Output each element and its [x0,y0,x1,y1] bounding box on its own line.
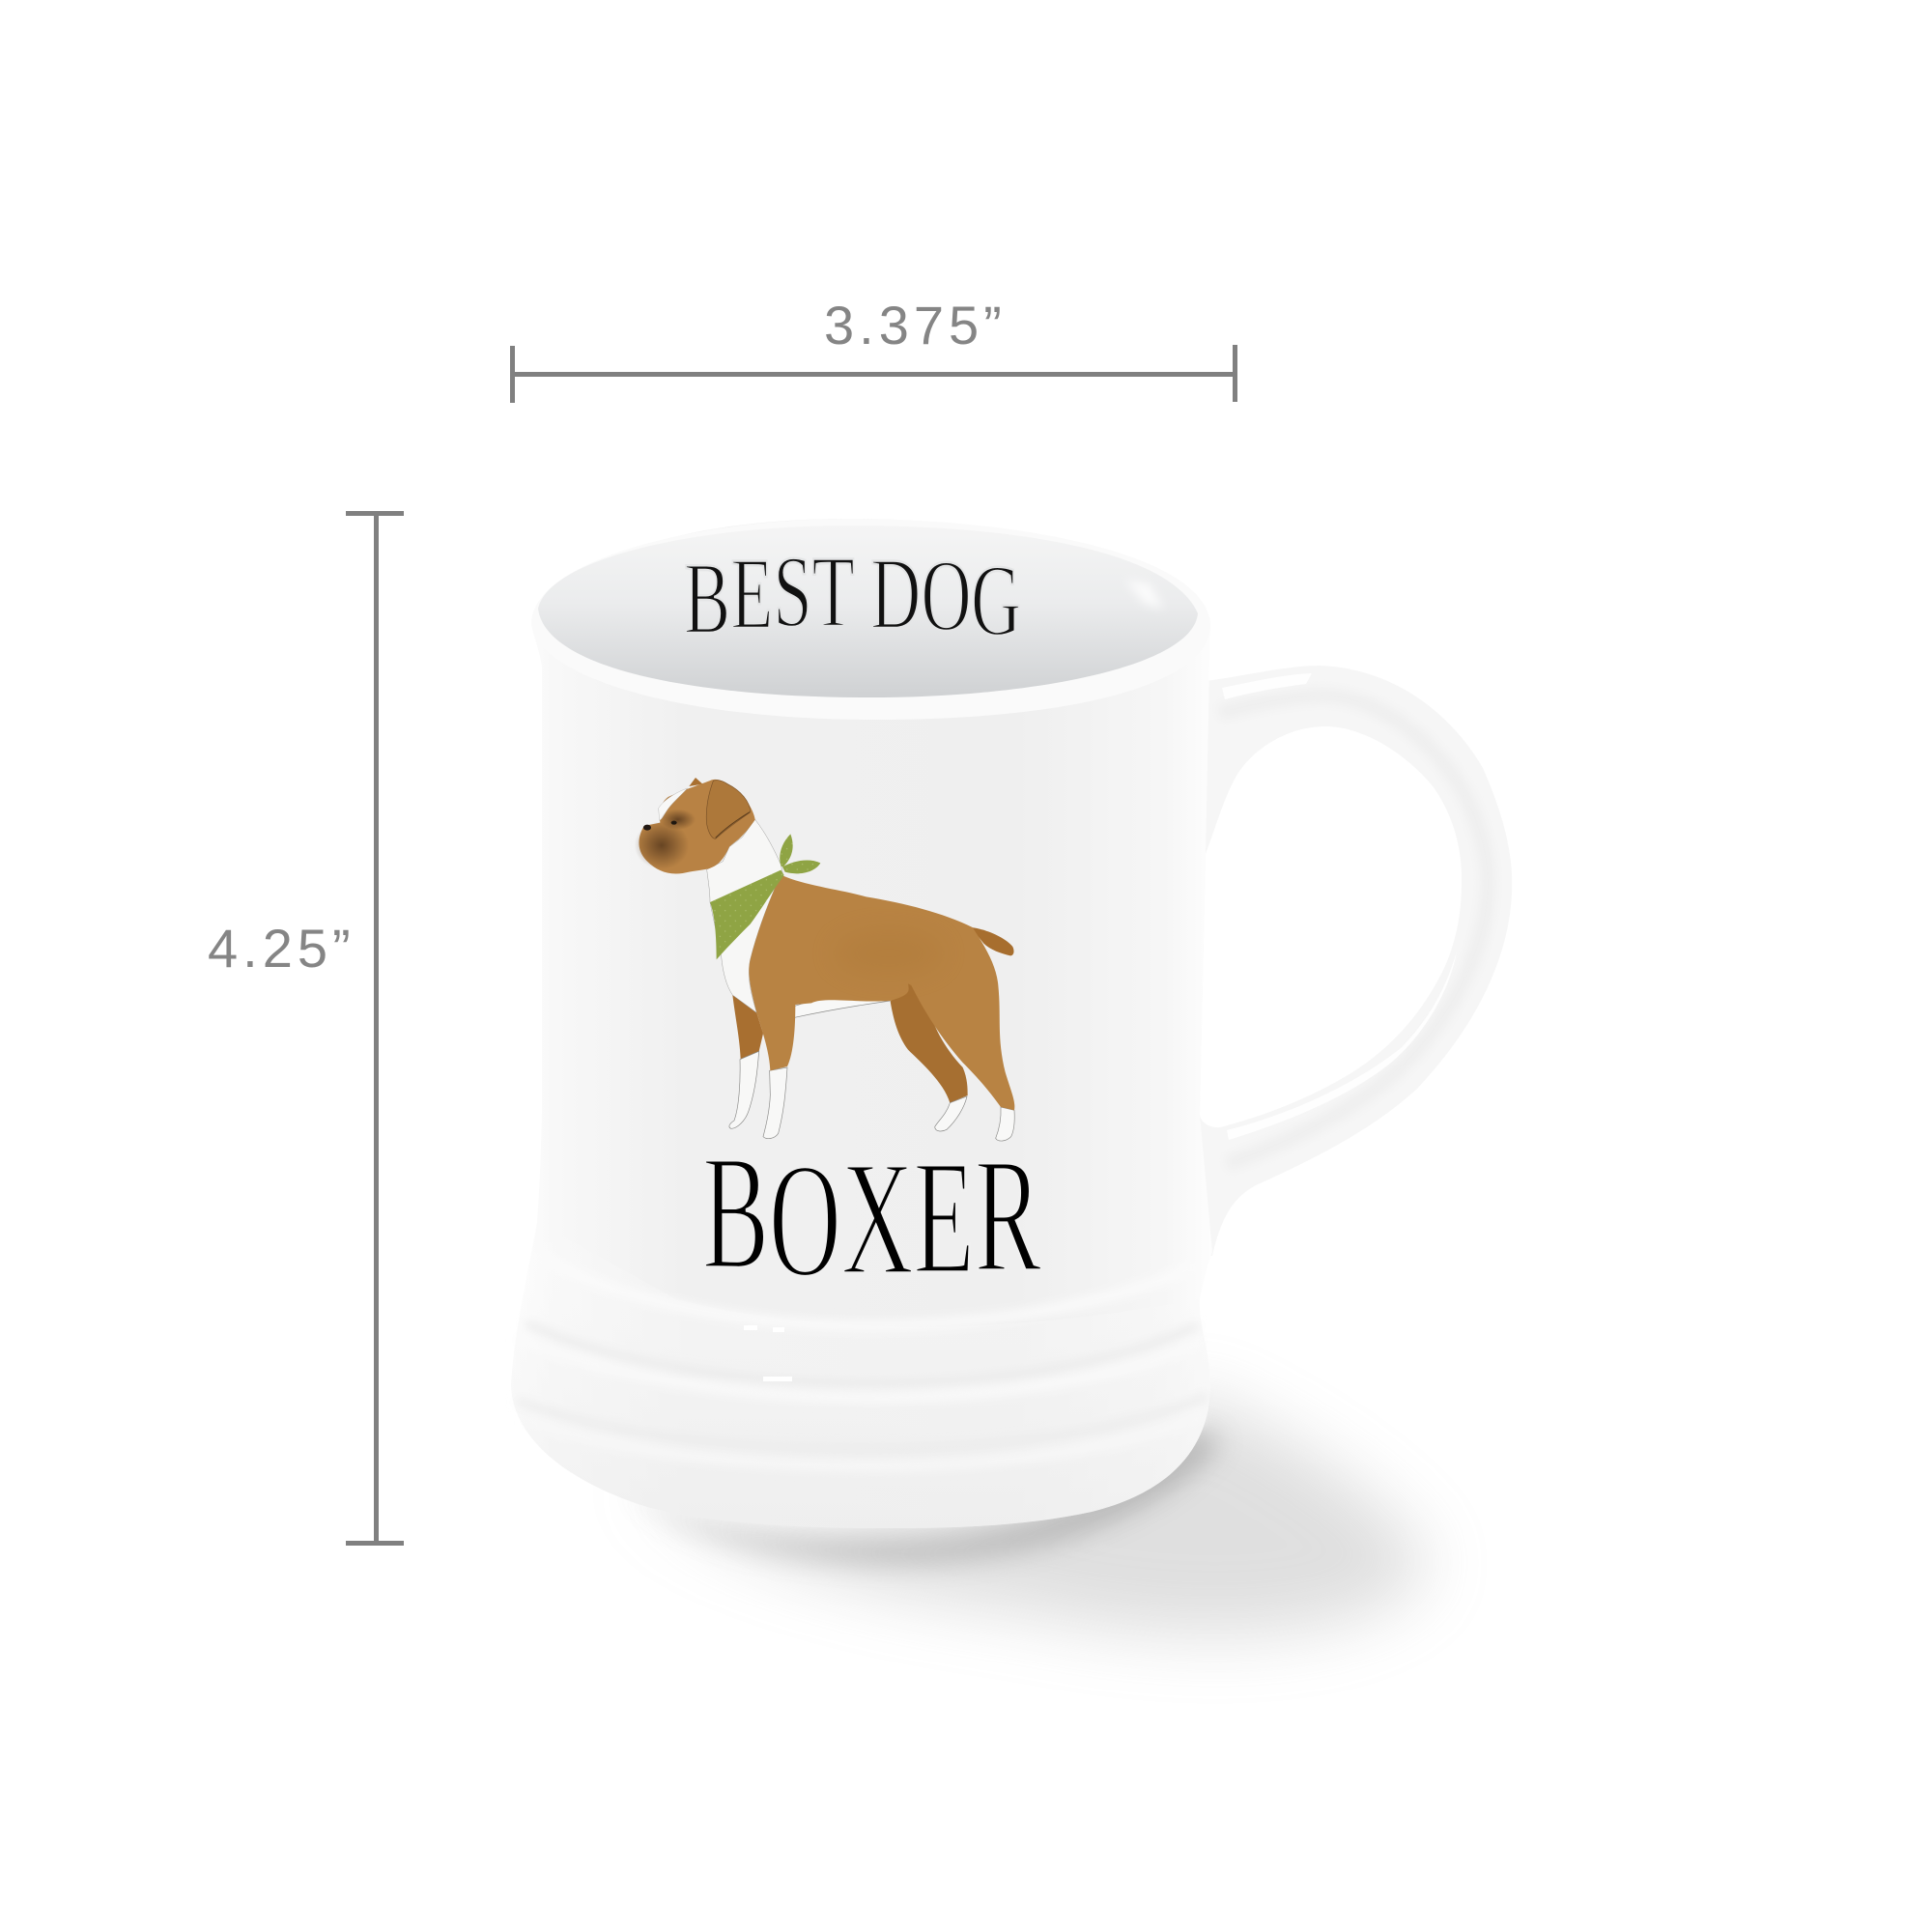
width dimension: 3.375 in [510,295,1237,403]
height label: 4.25” [208,918,355,979]
mug [511,519,1512,1528]
underbelly white [794,999,891,1017]
width label: 3.375” [824,295,1007,355]
body [749,876,1014,1110]
mug body [511,519,1212,1528]
mug shadow [618,1391,1430,1635]
interior highlight [1125,580,1164,609]
neck and chest white [707,819,783,1012]
far front leg [732,995,763,1060]
handle highlights [1222,673,1312,699]
near front foot [763,1067,787,1139]
height dimension: 4.25 in [208,511,404,1546]
ribbed base [511,1222,1210,1528]
dog head [635,778,755,873]
handle midline shading [1219,696,1488,1164]
mug handle [1183,666,1512,1256]
body shading [834,930,944,976]
green bandana [710,834,820,959]
text: BOXER: BOXER [702,1122,1041,1311]
mug rim [531,519,1210,720]
tail [971,927,1014,955]
dog illustration: boxer with green bandana [635,778,1014,1141]
far hind leg [891,980,968,1103]
text: BEST DOG: BEST DOG [684,534,1021,657]
mug interior [538,526,1198,697]
near hind foot [996,1107,1014,1141]
